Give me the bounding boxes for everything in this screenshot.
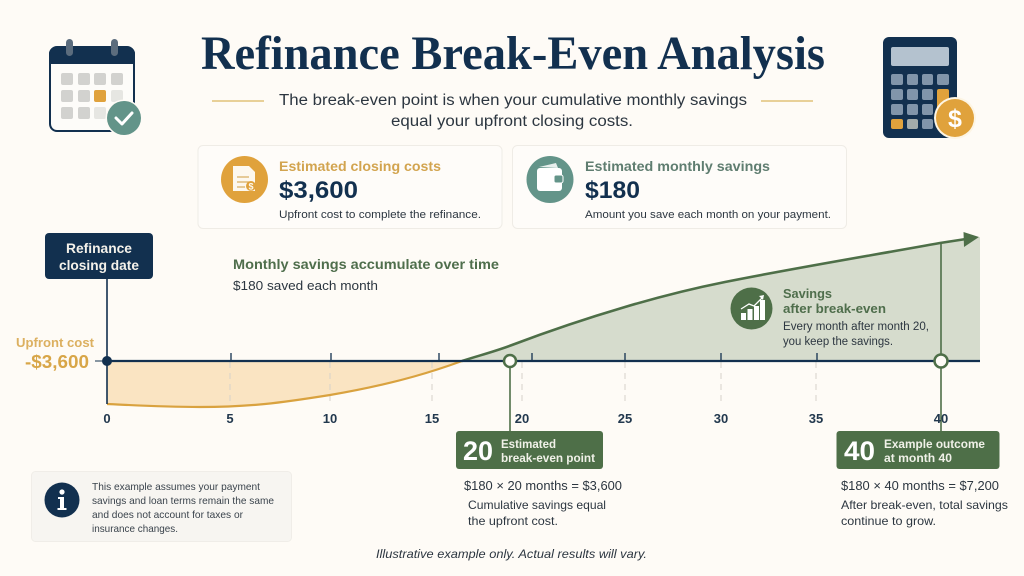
panel: monthly savings [512, 146, 846, 228]
text: month 20 calculation: the upfront cost. [468, 514, 558, 528]
panel: monthly savings: Estimated monthly savings [585, 158, 770, 174]
green curve with arrow [462, 232, 979, 361]
callout: closing date: Refinance [66, 240, 132, 256]
text: month 20 calculation: Cumulative savings equal [468, 498, 606, 512]
callout: month 40: 40 [844, 436, 875, 466]
green savings area [462, 237, 980, 361]
callout: month 40: at month 40 [884, 451, 952, 465]
icon: calculator: $ [948, 105, 962, 133]
text: monthly savings accumulate: $180 saved each month [233, 278, 378, 293]
callout: month 20 [456, 431, 603, 469]
callout: closing date [45, 233, 153, 279]
panel: assumptions note: and does not account for taxes or [92, 509, 243, 521]
start line and dot [106, 279, 108, 404]
icon: calculator [883, 37, 976, 139]
panel: assumptions note: This example assumes your payment [92, 481, 260, 493]
panel: closing costs: Estimated closing costs [279, 158, 441, 174]
icon: document: $ [248, 182, 254, 192]
callout: month 40 [836, 431, 1000, 469]
axis [107, 360, 980, 362]
panel: closing costs [198, 146, 502, 228]
panel: assumptions note: insurance changes. [92, 523, 178, 535]
month labels: 5 [226, 411, 234, 426]
callout: closing date: closing date [59, 257, 139, 273]
label: upfront cost [16, 335, 95, 372]
orange cost area [107, 361, 462, 407]
month labels: 30 [714, 411, 728, 426]
callout: month 20: break-even point [501, 451, 595, 465]
annotation: savings after break-even [730, 286, 929, 348]
month labels [103, 411, 948, 426]
panel: monthly savings: Amount you save each month on your payment. [585, 209, 831, 221]
icon: document [221, 156, 268, 203]
callout: month 20: 20 [463, 436, 493, 466]
month labels: 25 [618, 411, 632, 426]
subtitle: The break-even point is when your cumulative monthly savings [279, 92, 747, 109]
title: Refinance Break-Even Analysis [201, 27, 825, 80]
text: month 20 calculation [464, 479, 622, 528]
marker lines [509, 361, 511, 432]
panel: assumptions note: savings and loan terms remain the same [92, 495, 274, 507]
panel: assumptions note [32, 472, 292, 542]
text: month 40 calculation: After break-even, total savings [841, 498, 1008, 512]
month labels: 20 [515, 411, 529, 426]
month labels: 15 [425, 411, 439, 426]
text: month 40 calculation: continue to grow. [841, 514, 936, 528]
month labels: 40 [934, 411, 948, 426]
month labels: 10 [323, 411, 337, 426]
text: monthly savings accumulate [233, 256, 499, 293]
text: month 40 calculation: $180 × 40 months = $7,200 [841, 479, 999, 493]
month labels: 0 [103, 411, 111, 426]
panel: monthly savings: $180 [585, 177, 640, 204]
orange curve [107, 361, 462, 407]
icon: wallet [526, 156, 574, 203]
icon: calendar [49, 39, 142, 136]
label: upfront cost: Upfront cost [16, 335, 95, 350]
text: monthly savings accumulate: Monthly savings accumulate over time [233, 256, 499, 272]
annotation: savings after break-even: after break-even [783, 301, 886, 316]
label: upfront cost: -$3,600 [25, 352, 89, 372]
footnote: Illustrative example only. Actual results will vary. [376, 547, 647, 561]
panel: closing costs: Upfront cost to complete the refinance. [279, 209, 481, 221]
icon: growth chart [730, 288, 772, 330]
callout: month 20: Estimated [501, 437, 556, 451]
dashed month guides [230, 362, 816, 405]
annotation: savings after break-even: you keep the savings. [783, 336, 893, 348]
text: month 20 calculation: $180 × 20 months = $3,600 [464, 479, 622, 493]
chart: break-even timeline [95, 232, 980, 432]
icon: info [44, 482, 80, 518]
subtitle [279, 92, 747, 130]
subtitle: equal your upfront closing costs. [391, 113, 633, 130]
callout: month 40: Example outcome [884, 437, 985, 451]
month labels: 35 [809, 411, 823, 426]
text: month 40 calculation [841, 479, 1008, 528]
annotation: savings after break-even: Savings [783, 286, 832, 301]
annotation: savings after break-even: Every month after month 20, [783, 321, 929, 333]
panel: closing costs: $3,600 [279, 177, 358, 204]
